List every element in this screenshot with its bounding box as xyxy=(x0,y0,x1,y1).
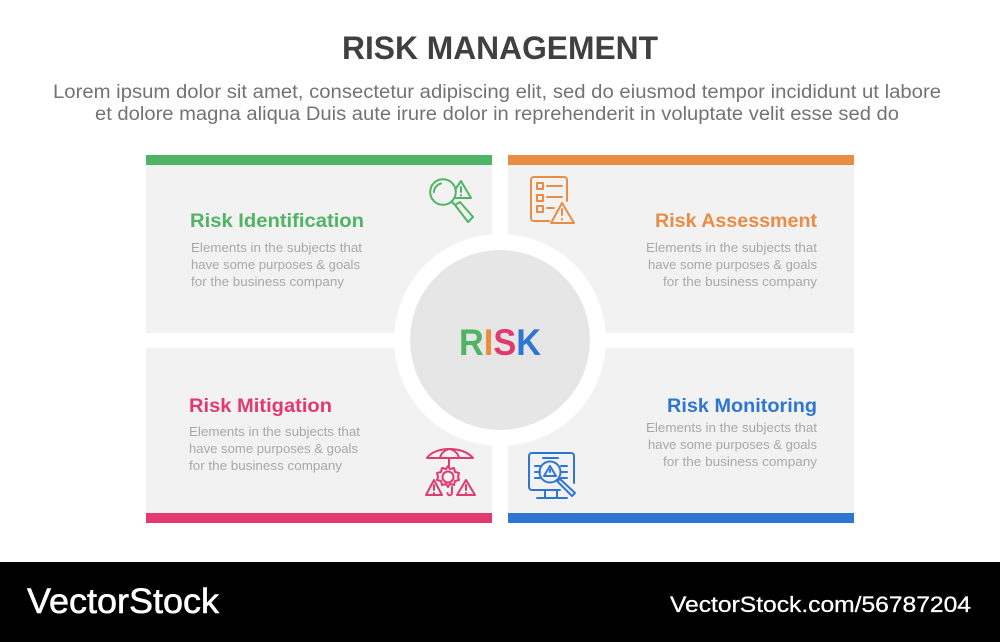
heading: risk mitigation: Risk Mitigation xyxy=(189,396,332,417)
text block: risk assessment: have some purposes & goals xyxy=(648,257,818,272)
text block: risk identification: for the business company xyxy=(191,274,345,289)
subtitle: et dolore magna aliqua Duis aute irure dolor in reprehenderit in voluptate velit esse sed do xyxy=(95,104,899,125)
text block: risk identification: have some purposes & goals xyxy=(191,257,361,272)
heading: risk assessment: Risk Assessment xyxy=(655,211,818,232)
subtitle xyxy=(53,82,941,125)
panel: risk mitigation xyxy=(146,348,492,523)
icon: umbrella gear and warnings xyxy=(426,449,475,495)
watermark url: VectorStock.com/56787204 xyxy=(670,592,971,617)
text block: risk monitoring: have some purposes & goals xyxy=(648,437,818,452)
watermark bar xyxy=(0,562,1000,642)
heading: risk monitoring: Risk Monitoring xyxy=(667,396,817,417)
panel: risk monitoring xyxy=(508,348,854,523)
subtitle: Lorem ipsum dolor sit amet, consectetur adipiscing elit, sed do eiusmod tempor incididunt ut labore xyxy=(53,82,941,103)
text block: risk monitoring: for the business company xyxy=(663,454,818,469)
text block: risk identification: Elements in the subjects that xyxy=(191,240,362,255)
panel: risk assessment xyxy=(508,155,854,333)
heading: risk identification: Risk Identification xyxy=(190,211,364,232)
text block: risk assessment: Elements in the subjects that xyxy=(646,240,817,255)
text block: risk mitigation: for the business company xyxy=(189,458,343,473)
center circle xyxy=(394,234,606,446)
text block: risk mitigation: Elements in the subjects that xyxy=(189,424,360,439)
text block: risk identification xyxy=(191,240,362,289)
icon: magnifier with warning xyxy=(430,179,473,222)
text block: risk mitigation: have some purposes & goals xyxy=(189,441,359,456)
text block: risk monitoring: Elements in the subjects that xyxy=(646,420,817,435)
icon: monitor with magnifier xyxy=(529,453,575,498)
text block: risk mitigation xyxy=(189,424,360,473)
icon: checklist with warning xyxy=(531,177,574,223)
center word: RISK: RISK xyxy=(459,322,541,363)
text block: risk monitoring xyxy=(646,420,818,469)
text block: risk assessment: for the business company xyxy=(663,274,818,289)
panel: risk identification xyxy=(146,155,492,333)
text block: risk assessment xyxy=(646,240,818,289)
title: RISK MANAGEMENT xyxy=(342,30,658,66)
watermark logo: VectorStock xyxy=(27,582,220,621)
